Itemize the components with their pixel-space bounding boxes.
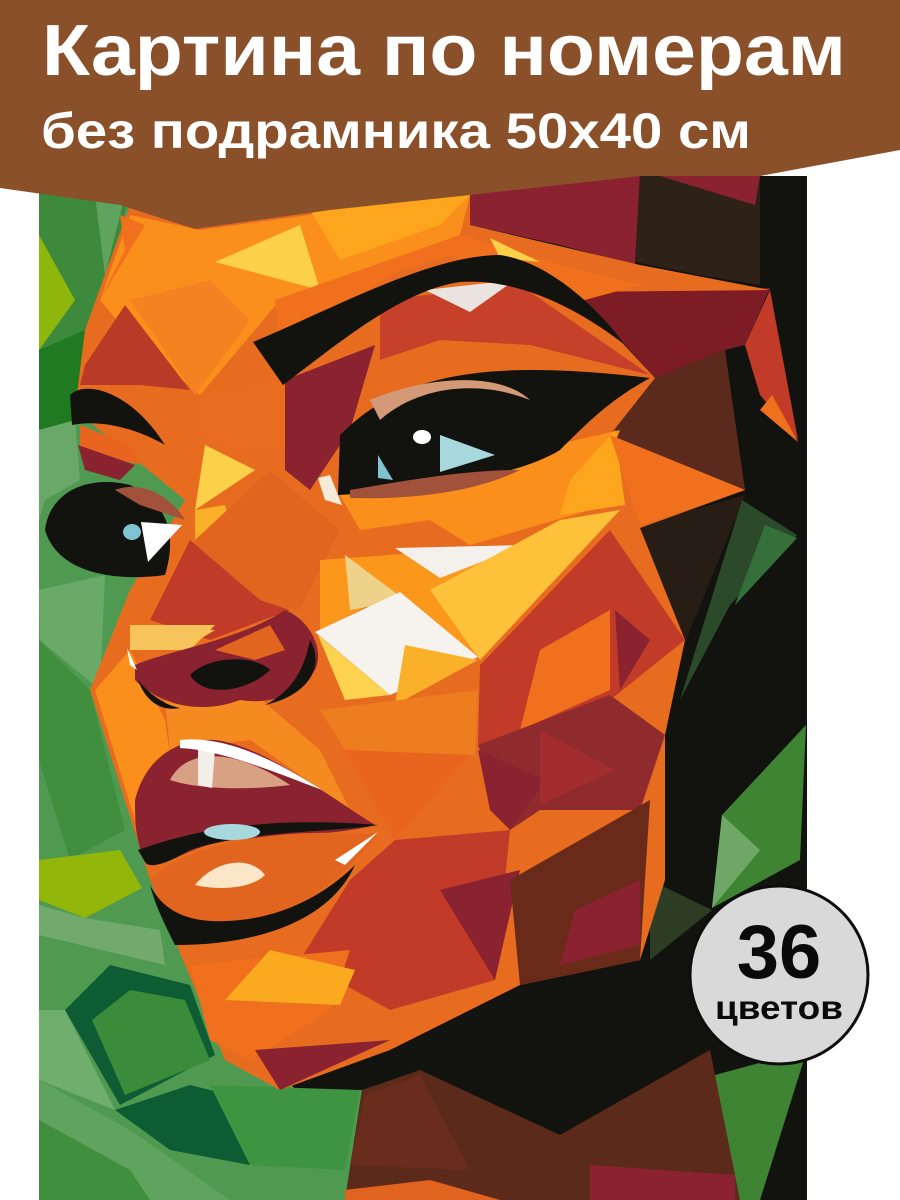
right eye [338,370,650,495]
right brow [253,255,625,385]
badge number: 36 [737,910,821,995]
badge: 36 colours [690,886,868,1064]
subtitle: без подрамника 50х40 см [41,103,751,159]
left eye [45,482,170,577]
facial features: brows, eyes, nose, lips [45,255,650,945]
dark hair and neck facets [345,176,807,1200]
left brow [70,389,165,445]
painting: polygonal portrait [39,176,807,1200]
badge label: цветов [715,989,843,1026]
face base [75,195,770,1090]
banner: brown header [0,0,900,229]
title: Картина по номерам [42,11,846,91]
lips [135,740,375,862]
green foliage background [39,176,362,1200]
nose [135,610,318,707]
